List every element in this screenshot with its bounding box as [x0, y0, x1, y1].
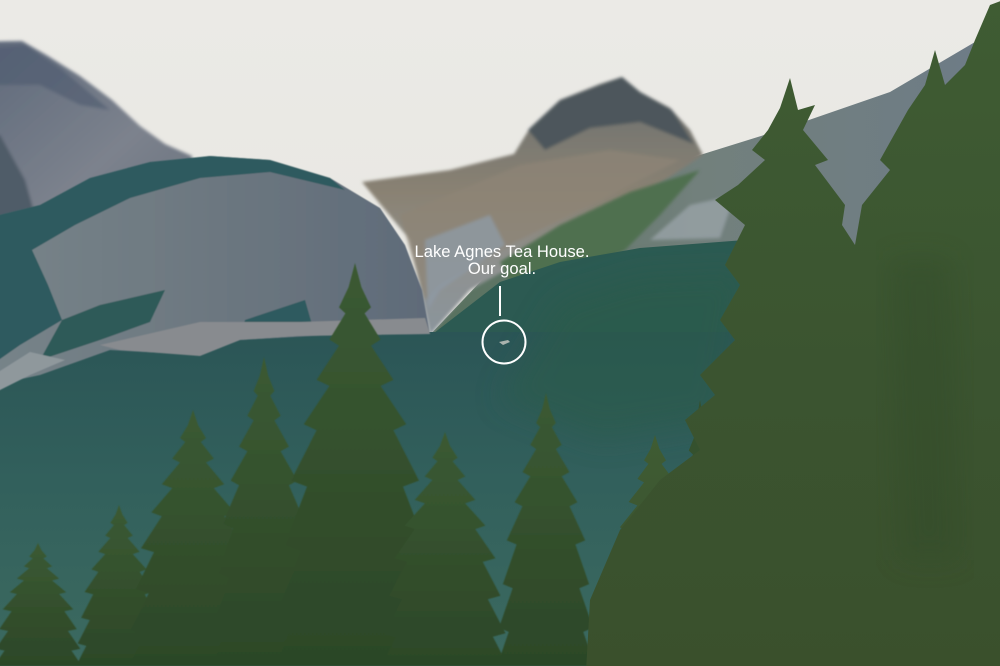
goal circle: [482, 320, 526, 364]
valley forest: [0, 332, 800, 666]
green slope: [500, 170, 700, 300]
tea house: [499, 340, 510, 345]
forest slope behind: [425, 240, 770, 360]
pale ridge patch: [650, 195, 735, 240]
annotation label: [415, 242, 589, 278]
annotation label: Lake Agnes Tea House.: [415, 242, 589, 261]
pointer line: [499, 286, 501, 316]
central peak: [362, 77, 703, 335]
right ridge: [425, 30, 1000, 666]
right foreground trees: [585, 0, 1000, 666]
tree shading: [890, 260, 960, 560]
left mountain: [0, 41, 192, 240]
green forest patch: [500, 270, 745, 440]
background trees: [0, 263, 595, 666]
annotation label: Our goal.: [468, 259, 536, 278]
dome mountain: [0, 156, 430, 405]
